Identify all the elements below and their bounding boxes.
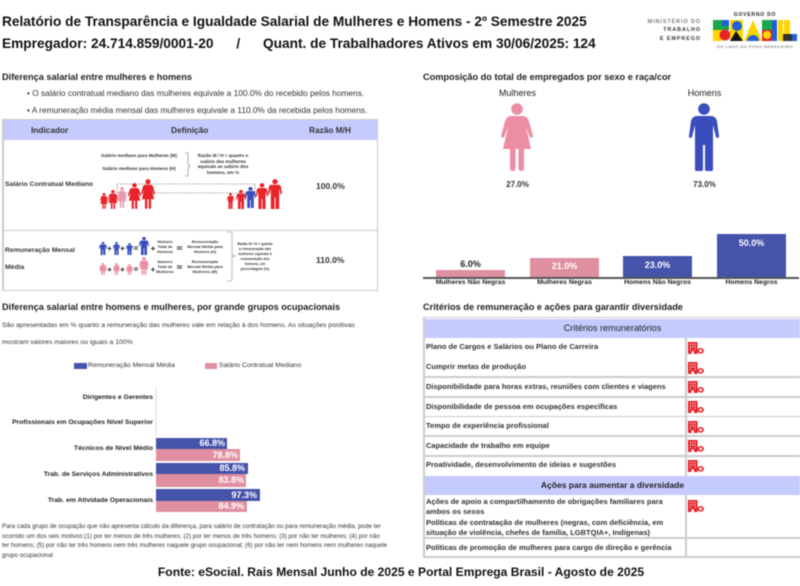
group: atividade operacionais: 84.9% bbox=[218, 501, 244, 511]
title: report heading: Relatório de Transparência e Igualdade Salarial de Mulheres e Homens - 2º Semestre 2025 bbox=[2, 14, 587, 29]
logo: governo do brasil: DO LADO DO POVO BRASILEIRO bbox=[717, 44, 793, 49]
legend: Salário Contratual Mediano bbox=[219, 362, 301, 369]
row value: 110.0% bbox=[316, 255, 344, 265]
diagram: remuneração média definition: Mensal Média para bbox=[187, 264, 223, 269]
heading: critérios: Critérios de remuneração e ações para garantir diversidade bbox=[423, 302, 683, 312]
table header bbox=[4, 120, 378, 140]
footer: source: Fonte: eSocial. Rais Mensal Junho de 2025 e Portal Emprega Brasil - Agosto de 2025 bbox=[158, 565, 644, 579]
diagram: salário mediano definition: equivale ao salário dos bbox=[198, 164, 248, 169]
text block: key findings: • A remuneração média mensal das mulheres equivale a 110.0% da recebida pelos homens. bbox=[27, 105, 367, 115]
diagram: remuneração média definition: Homens bbox=[157, 249, 173, 254]
logo: ministério do trabalho e emprego: TRABALHO bbox=[663, 27, 701, 33]
diagram: remuneração média definition: remuneração dos bbox=[240, 257, 270, 261]
text block: explanation: São apresentadas em % quanto a remuneração das mulheres vale em relação à dos homens. As situações positivas bbox=[2, 322, 355, 329]
diagram: remuneração média definition: homens, em bbox=[245, 262, 265, 266]
row label: remuneração: Remuneração Mensal bbox=[5, 247, 75, 254]
panel: criteria table: Proatividade, desenvolvimento de ideias e sugestões bbox=[426, 460, 616, 469]
logo: governo do brasil bbox=[712, 11, 798, 49]
icon: building (horas extras) bbox=[687, 380, 705, 394]
logo: ministério do trabalho e emprego: E EMPREGO bbox=[660, 36, 701, 42]
pictogram: mulheres: Mulheres bbox=[499, 88, 536, 98]
group: serviços administrativos: Trab. de Serviços Administrativos bbox=[44, 471, 153, 478]
logo: ministério do trabalho e emprego: MINISTÉRIO DO bbox=[648, 19, 701, 25]
panel: criteria table: situação de violência, chefes de família, LGBTQIA+, Indígenas) bbox=[426, 528, 650, 536]
diagram: salário mediano definition: Salário mediano para Homens (H) bbox=[102, 166, 176, 171]
header: critérios remuneratórios bbox=[425, 319, 800, 338]
pictogram: mulheres bbox=[498, 88, 536, 189]
text block: explanation: mostram valores maiores ou iguais a 100% bbox=[2, 339, 133, 346]
group: técnicos: 78.8% bbox=[212, 450, 238, 460]
bar: homens negros bbox=[717, 234, 786, 277]
bar chart: composição por raça/cor: 21.0% bbox=[552, 261, 577, 271]
bar chart: composição por raça/cor: 50.0% bbox=[739, 238, 764, 248]
row value: 100.0% bbox=[316, 181, 345, 191]
diagram: remuneração média definition: Número bbox=[157, 239, 173, 244]
group: técnicos: Técnicos de Nível Médio bbox=[74, 445, 153, 452]
header: ações para diversidade bbox=[425, 476, 800, 495]
icon: building (metas) bbox=[687, 361, 705, 375]
bar chart: composição por raça/cor: 6.0% bbox=[460, 259, 481, 269]
action rows: Ações de apoio a compartilhamento de obrigações familiares para bbox=[426, 497, 663, 506]
text block: explanation bbox=[2, 322, 356, 346]
legend bbox=[73, 362, 302, 370]
panel: criteria table: Políticas de contratação de mulheres (negras, com deficiência, em bbox=[426, 518, 663, 527]
group: atividade operacionais bbox=[47, 488, 261, 513]
icon: building (equipe) bbox=[687, 439, 705, 453]
diagram: salário mediano definition: salário das mulheres bbox=[200, 159, 246, 164]
logo: ministério do trabalho e emprego bbox=[647, 18, 701, 42]
diagram: remuneração média definition: Mensal Média para bbox=[187, 244, 223, 249]
pictogram: homens: 73.0% bbox=[693, 180, 716, 189]
group: serviços administrativos bbox=[43, 462, 249, 488]
action rows bbox=[426, 497, 664, 516]
diagram: salário mediano definition: homens, em % bbox=[207, 170, 239, 175]
group: atividade operacionais: 97.3% bbox=[231, 490, 257, 500]
bar: mulheres não negras bbox=[436, 270, 505, 277]
text block: footnote: ocorrido um dos seis motivos:(1) por ter menos de três mulheres; (2) por ter menos de três homens; (3) por não ter mulheres; (4) por não bbox=[2, 532, 380, 540]
table header: Indicador bbox=[31, 125, 68, 135]
heading: composição: Composição do total de empregados por sexo e raça/cor bbox=[423, 72, 671, 82]
text block: footnote: ter homens; (5) por não ter três homens nem três mulheres naquele grupo ocupacional; (6) por não ter nem homens nem mulheres naquele bbox=[2, 542, 387, 549]
panel: criteria table bbox=[423, 317, 800, 558]
group: serviços administrativos: 85.8% bbox=[219, 463, 245, 473]
legend: Remuneração Mensal Média bbox=[88, 362, 175, 369]
diagram: salário mediano definition bbox=[99, 152, 283, 210]
group: técnicos bbox=[74, 437, 241, 462]
pictogram: homens: Homens bbox=[688, 88, 721, 98]
pictogram: mulheres: 27.0% bbox=[506, 180, 529, 189]
criterion rows: Plano de Cargos e Salários ou Plano de Carreira bbox=[426, 342, 598, 351]
row label: remuneração: Média bbox=[5, 264, 24, 271]
icon: building (ações de apoio) bbox=[687, 499, 705, 513]
table header: Definição bbox=[171, 125, 208, 135]
label: dirigentes: Dirigentes e Gerentes bbox=[83, 394, 153, 401]
panel: indicator table bbox=[2, 119, 378, 291]
action rows: ambos os sexos bbox=[426, 506, 484, 516]
bar chart: grupos ocupacionais bbox=[12, 387, 261, 513]
diagram: remuneração média definition: Homens (H) bbox=[194, 249, 216, 254]
pictogram: homens bbox=[688, 88, 722, 189]
label: profissionais: Profissionais em Ocupações Nível Superior bbox=[12, 419, 153, 426]
table header: Razão M/H bbox=[309, 125, 351, 135]
diagram: remuneração média definition bbox=[98, 231, 274, 282]
header: ações para diversidade: Ações para aumentar a diversidade bbox=[541, 480, 684, 490]
bar chart: composição por raça/cor: 23.0% bbox=[645, 260, 670, 270]
group: atividade operacionais: Trab. em Atividade Operacionais bbox=[48, 497, 153, 504]
diagram: remuneração média definition: Razão M / H = quanto bbox=[237, 242, 273, 246]
panel: criteria table: Disponibilidade de pessoa em ocupações específicas bbox=[426, 402, 617, 411]
subtitle: employer and workers: Empregador: 24.714.859/0001-20 / Quant. de Trabalhadores Ativos em 30/06/2025: 124 bbox=[2, 36, 596, 51]
panel: criteria table: Capacidade de trabalho em equipe bbox=[426, 441, 550, 450]
diagram: remuneração média definition: a remuneração das bbox=[239, 247, 271, 251]
diagram: remuneração média definition: Mulheres bbox=[156, 269, 174, 274]
diagram: remuneração média definition: mulheres equivale à bbox=[238, 252, 272, 256]
text block: key findings: • O salário contratual mediano das mulheres equivale a 100.0% do recebido pelos homens. bbox=[27, 88, 364, 98]
icon: building (ocupações específicas) bbox=[687, 400, 705, 414]
diagram: remuneração média definition: Remuneração bbox=[192, 259, 218, 264]
diagram: remuneração média definition: Número bbox=[157, 259, 173, 264]
diagram: remuneração média definition: Total de bbox=[157, 264, 173, 269]
icon: building (plano de cargos) bbox=[687, 341, 705, 355]
diagram: remuneração média definition: Total de bbox=[157, 244, 173, 249]
text block: key findings bbox=[26, 88, 368, 116]
row label: salário contratual mediano: Salário Contratual Mediano bbox=[5, 181, 93, 188]
panel: criteria table: Políticas de promoção de mulheres para cargo de direção e gerência bbox=[426, 543, 672, 552]
diagram: remuneração média definition: Mulheres (M) bbox=[193, 269, 217, 274]
bar chart: composição por raça/cor: Homens Não Negros bbox=[624, 279, 691, 286]
heading: diferença por grupos ocupacionais: Diferença salarial entre homens e mulheres, por grande grupos ocupacionais bbox=[2, 302, 340, 312]
icon: building (experiência) bbox=[687, 420, 705, 434]
panel: criteria table: Disponibilidade para horas extras, reuniões com clientes e viagens bbox=[426, 382, 666, 391]
bar: homens não negros bbox=[623, 256, 692, 277]
diagram: salário mediano definition: Razão M / H = quanto o bbox=[198, 153, 248, 158]
diagram: remuneração média definition: Remuneração bbox=[192, 239, 218, 244]
text block: footnote: grupo ocupacional bbox=[2, 552, 53, 558]
panel: criteria table: Cumprir metas de produção bbox=[426, 362, 526, 371]
text block: footnote bbox=[2, 522, 388, 560]
header: critérios remuneratórios: Critérios remuneratórios bbox=[564, 323, 661, 333]
bar chart: composição por raça/cor bbox=[422, 233, 800, 286]
bar chart: composição por raça/cor: Mulheres Negras bbox=[537, 279, 592, 286]
bar: mulheres negras bbox=[530, 258, 599, 277]
text block: footnote: Para cada grupo de ocupação que não apresenta cálculo da diferença, para salário de contratação ou para remuneração média, pode ter bbox=[2, 523, 381, 530]
icon: building (proatividade) bbox=[687, 459, 705, 473]
bar chart: composição por raça/cor: Homens Negros bbox=[725, 279, 778, 286]
panel: criteria table: Tempo de experiência profissional bbox=[426, 421, 549, 430]
diagram: salário mediano definition: Salário mediano para Mulheres (M) bbox=[101, 153, 177, 158]
diagram: remuneração média definition: porcentagem (%) bbox=[241, 267, 269, 271]
group: serviços administrativos: 83.8% bbox=[218, 475, 244, 485]
logo: governo do brasil: GOVERNO DO bbox=[734, 12, 776, 18]
axis labels: Mulheres Não Negras bbox=[436, 279, 505, 286]
row label: remuneração bbox=[4, 246, 76, 271]
heading: diferença salarial: Diferença salarial entre mulheres e homens bbox=[2, 72, 192, 82]
group: técnicos: 66.8% bbox=[199, 438, 225, 448]
